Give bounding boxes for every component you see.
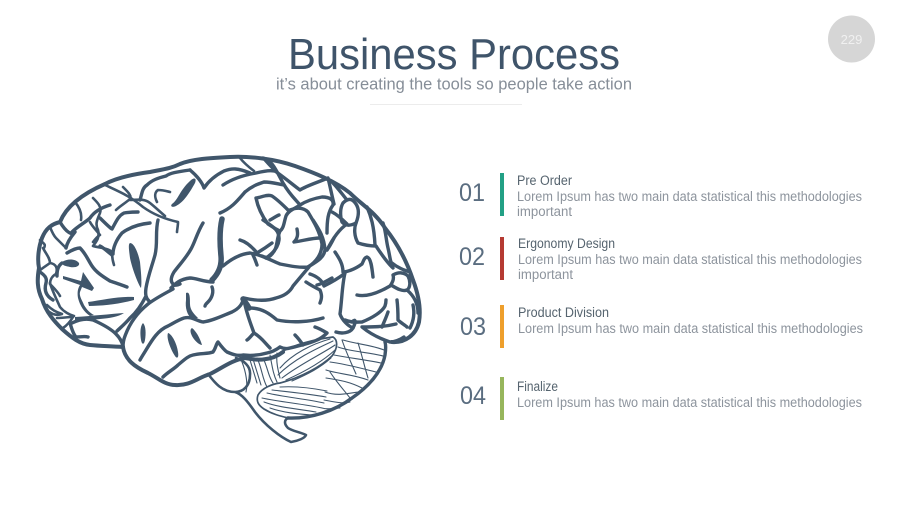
- item 02: [459, 236, 862, 282]
- heading: Finalize: [517, 379, 558, 394]
- cerebellum folds: [242, 337, 384, 418]
- body text: important: [517, 204, 572, 219]
- occipital lobe folds: [306, 182, 418, 342]
- item 01: [459, 173, 862, 219]
- bar teal: [500, 173, 504, 216]
- bar green: [500, 377, 504, 420]
- number 01: 01: [459, 179, 485, 207]
- bar red: [500, 237, 504, 280]
- subtitle: it’s about creating the tools so people take action: [276, 74, 632, 94]
- temporal front folds: [38, 222, 134, 346]
- page number badge: [828, 16, 875, 62]
- number 02: 02: [459, 243, 485, 271]
- item 03: [460, 305, 863, 348]
- cerebellum outline: [288, 342, 386, 418]
- item 04: [460, 377, 862, 420]
- parietal lobe folds: [220, 158, 334, 267]
- temporal lobe folds: [140, 299, 327, 377]
- body text: Lorem Ipsum has two main data statistical this methodologies: [517, 189, 862, 204]
- heading: Product Division: [518, 305, 609, 320]
- title: Business Process: [288, 30, 620, 79]
- frontal lobe folds: [60, 158, 276, 265]
- body text: important: [518, 267, 573, 282]
- body text: Lorem Ipsum has two main data statistical this methodologies: [517, 395, 862, 410]
- number 03: 03: [460, 313, 486, 341]
- number 04: 04: [460, 382, 486, 410]
- central trunk folds: [100, 219, 309, 360]
- brainstem and pons: [208, 358, 306, 442]
- cerebrum outline: [38, 157, 420, 347]
- page number badge: 229: [841, 32, 862, 47]
- body text: Lorem Ipsum has two main data statistical this methodologies: [518, 321, 863, 336]
- brain illustration: [38, 157, 420, 442]
- bar orange: [500, 305, 504, 348]
- heading: Ergonomy Design: [518, 236, 615, 251]
- heading: Pre Order: [517, 173, 572, 188]
- body text: Lorem Ipsum has two main data statistical this methodologies: [518, 252, 862, 267]
- lower edge of cerebrum: [123, 347, 283, 385]
